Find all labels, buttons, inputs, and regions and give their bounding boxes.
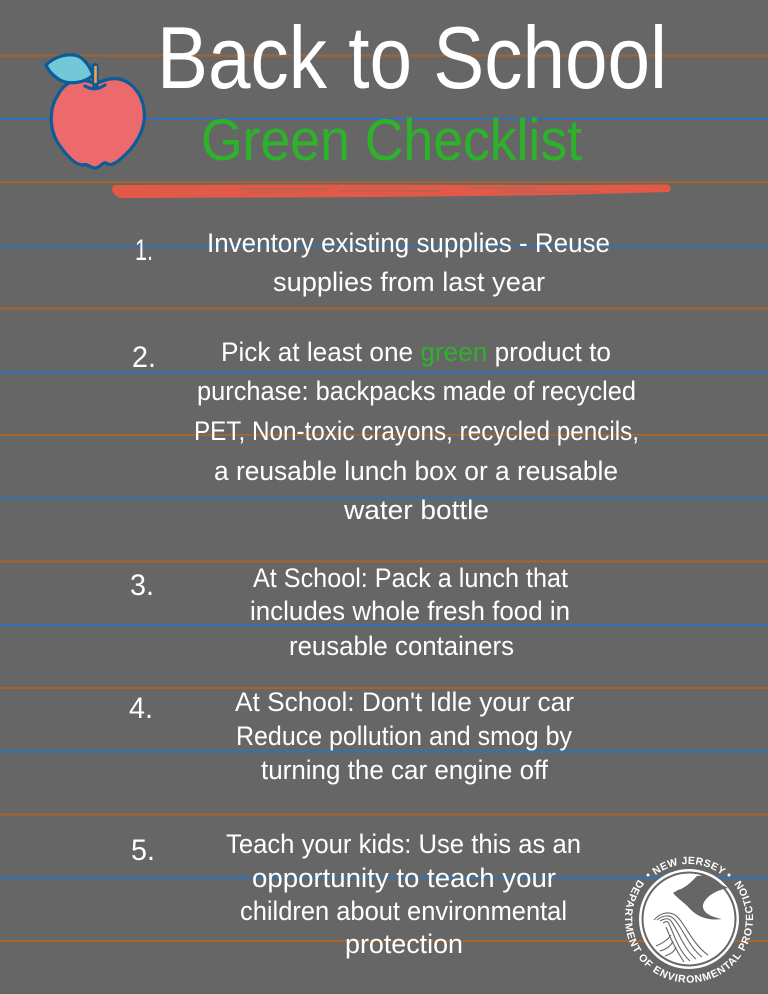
checklist item 4: 4. (129, 692, 153, 725)
checklist item 2: purchase: backpacks made of recycled (197, 376, 636, 406)
checklist item 3 (130, 563, 570, 661)
checklist item 3: 3. (130, 569, 154, 602)
logo: New Jersey Department of Environmental Protection: NEW JERSEY (652, 856, 726, 875)
checklist item 1: Inventory existing supplies - Reuse (207, 228, 610, 258)
checklist item 2: a reusable lunch box or a reusable (214, 456, 618, 486)
checklist item 5: protection (345, 929, 463, 959)
checklist item 4: At School: Don't Idle your car (235, 687, 574, 717)
red brush underline (112, 184, 671, 198)
checklist item 5: opportunity to teach your (252, 863, 556, 893)
checklist item 5: Teach your kids: Use this as an (226, 829, 581, 859)
checklist item 3: reusable containers (289, 631, 514, 661)
checklist item 5: children about environmental (240, 896, 567, 926)
checklist item 4: turning the car engine off (261, 755, 548, 785)
checklist item 5: 5. (131, 834, 155, 867)
checklist item 2 (132, 337, 639, 525)
checklist item 4: Reduce pollution and smog by (236, 721, 572, 751)
checklist item 1: supplies from last year (273, 267, 545, 297)
checklist item 1: 1. (135, 234, 153, 267)
checklist item 1 (135, 228, 610, 297)
checklist item 2: Pick at least one green product to (221, 337, 611, 367)
checklist item 2: PET, Non-toxic crayons, recycled pencils, (194, 416, 639, 446)
checklist item 2: 2. (132, 341, 156, 374)
checklist item 4 (129, 687, 574, 785)
logo: New Jersey Department of Environmental Protection: DEPARTMENT OF ENVIRONMENTAL PROTECTION (625, 880, 754, 983)
subtitle: Green Checklist (201, 108, 582, 173)
checklist item 5 (131, 829, 581, 959)
checklist item 3: At School: Pack a lunch that (253, 563, 568, 593)
checklist item 2: water bottle (343, 495, 489, 525)
icon: apple (46, 55, 144, 168)
checklist item 3: includes whole fresh food in (250, 596, 570, 626)
title: Back to School (157, 8, 667, 107)
